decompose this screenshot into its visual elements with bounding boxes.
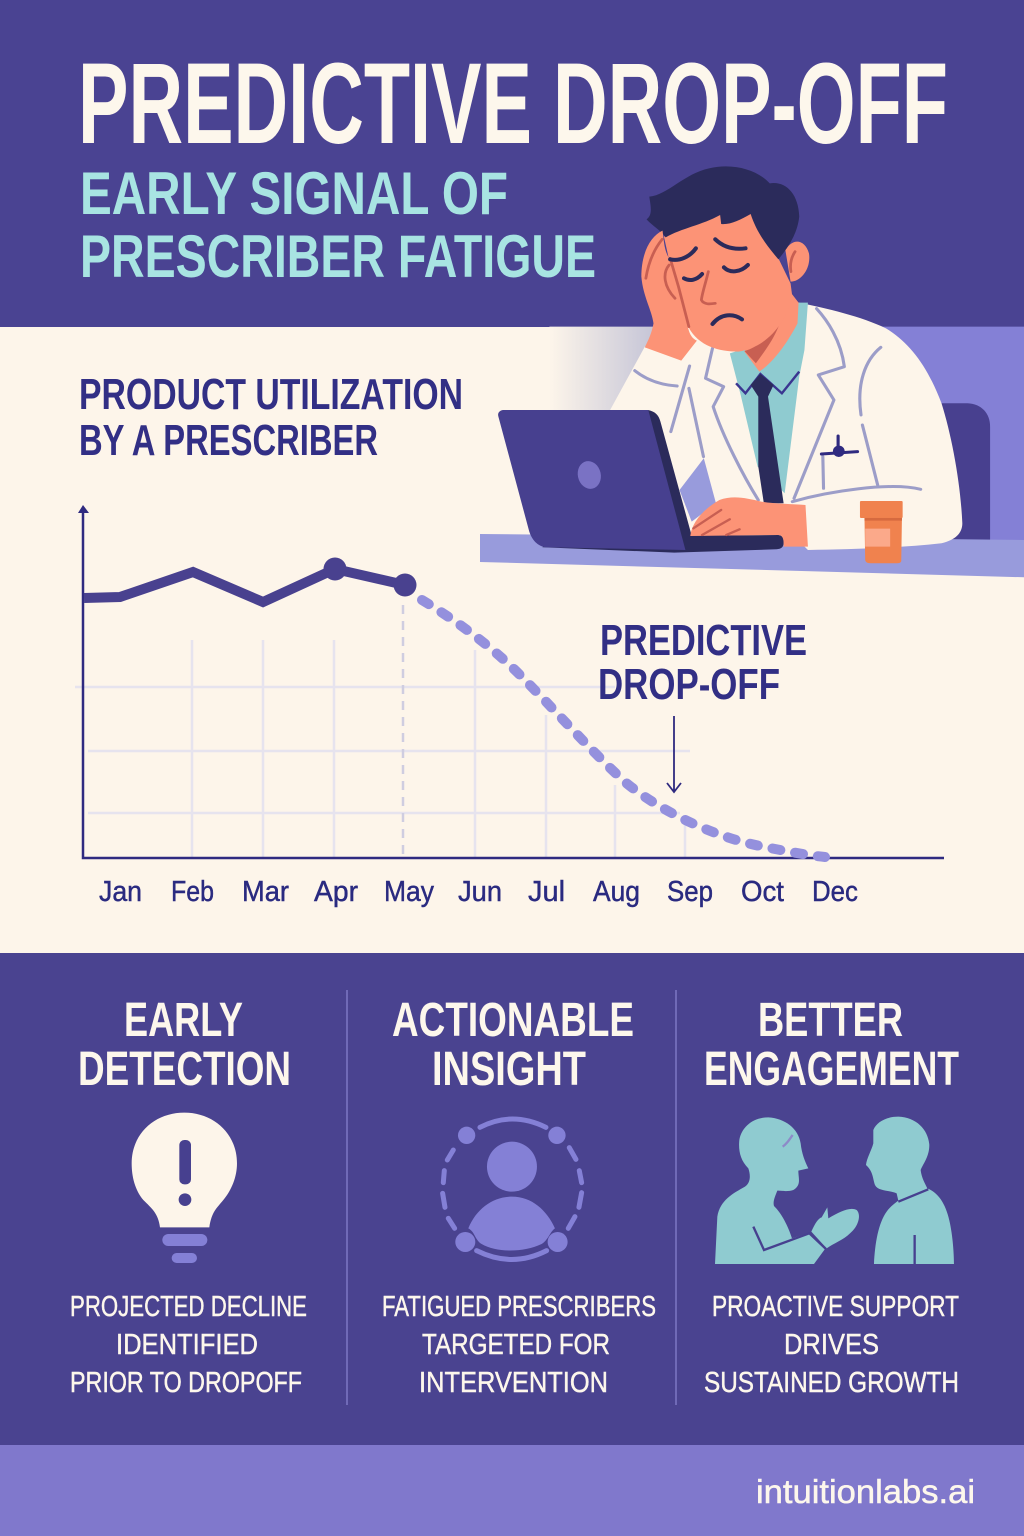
arrow to drop-off	[667, 716, 681, 792]
actual utilization line	[84, 569, 405, 602]
heading: ACTIONABLE	[392, 994, 634, 1047]
blue sleeve	[680, 458, 716, 522]
heading: DETECTION	[78, 1043, 291, 1096]
panel: actionable insight	[382, 994, 656, 1399]
chart heading: BY A PRESCRIBER	[79, 416, 378, 465]
hand on head	[641, 231, 697, 361]
panel: early detection	[70, 994, 307, 1399]
fading backdrop	[549, 327, 660, 410]
description: PROACTIVE SUPPORT	[712, 1291, 959, 1323]
heading	[392, 994, 634, 1096]
callout: predictive drop-off: PREDICTIVE	[600, 616, 807, 665]
may marker	[394, 574, 416, 596]
brand: intuitionlabs.ai	[756, 1473, 975, 1510]
benefits band	[0, 953, 1024, 1445]
month labels: May	[384, 876, 434, 908]
hand on laptop	[690, 497, 808, 547]
description: FATIGUED PRESCRIBERS	[382, 1291, 656, 1323]
subtitle	[80, 160, 596, 290]
grid lines	[75, 605, 690, 858]
month labels	[99, 876, 858, 908]
bottle cap	[860, 501, 903, 518]
description: INTERVENTION	[419, 1367, 608, 1399]
heading	[78, 994, 291, 1096]
heading: EARLY	[124, 994, 243, 1047]
line chart	[75, 505, 944, 908]
footer band	[0, 1445, 1024, 1536]
subtitle: EARLY SIGNAL OF	[80, 160, 508, 227]
panel: better engagement	[704, 994, 959, 1399]
icon: two people talking	[715, 1117, 954, 1264]
month labels: Aug	[593, 876, 640, 908]
subtitle: PRESCRIBER FATIGUE	[80, 223, 596, 290]
callout: predictive drop-off: DROP-OFF	[598, 660, 780, 709]
bottle shade	[864, 518, 902, 521]
medicine bottle body	[864, 517, 902, 563]
chart heading	[79, 370, 463, 465]
description: SUSTAINED GROWTH	[704, 1367, 959, 1399]
tie	[751, 374, 784, 503]
month labels: Sep	[667, 876, 713, 908]
axis arrow head	[78, 505, 89, 513]
axes	[83, 510, 944, 858]
description: PRIOR TO DROPOFF	[70, 1367, 302, 1399]
hand finger lines	[693, 510, 740, 535]
laptop base and side	[542, 410, 784, 553]
month labels: Mar	[242, 876, 289, 908]
ear detail	[790, 252, 795, 272]
finger lines	[646, 239, 689, 327]
ear	[785, 242, 809, 282]
month labels: Jun	[458, 876, 502, 908]
hair	[647, 166, 799, 259]
chart heading: PRODUCT UTILIZATION	[79, 370, 463, 419]
description	[704, 1291, 959, 1399]
face	[664, 213, 792, 352]
month labels: Oct	[741, 876, 784, 908]
description	[382, 1291, 656, 1399]
description	[70, 1291, 307, 1399]
callout: predictive drop-off	[598, 616, 807, 709]
description: TARGETED FOR	[422, 1329, 610, 1361]
description: DRIVES	[784, 1329, 879, 1361]
collar line	[736, 372, 799, 393]
face features: brows, eyes	[670, 239, 748, 324]
month labels: Feb	[171, 876, 214, 908]
neck shadow	[744, 290, 799, 372]
month labels: Jan	[99, 876, 142, 908]
heading	[704, 994, 959, 1096]
icon: light bulb with exclamation	[132, 1113, 237, 1263]
bottle label	[865, 529, 890, 547]
laptop lid	[498, 410, 685, 550]
coat lines	[635, 309, 921, 502]
neck shade	[744, 309, 784, 363]
heading: INSIGHT	[432, 1043, 586, 1096]
header band	[0, 0, 1024, 327]
desk	[480, 534, 1024, 577]
description: PROJECTED DECLINE	[70, 1291, 307, 1323]
pen clip	[833, 446, 845, 457]
description: IDENTIFIED	[116, 1329, 258, 1361]
month labels: Dec	[812, 876, 858, 908]
icon: person in dashed ring	[443, 1119, 582, 1259]
purple wall panel	[862, 327, 1024, 547]
shirt	[730, 303, 808, 493]
april marker	[324, 558, 346, 580]
month labels: Apr	[314, 876, 358, 908]
pen in pocket	[821, 436, 858, 454]
illustration: fatigued doctor at laptop	[480, 166, 1024, 577]
nose	[701, 272, 715, 304]
laptop logo	[575, 459, 604, 491]
projected dashed line	[422, 600, 825, 857]
cream chart panel background	[0, 327, 1024, 953]
white coat	[610, 303, 962, 550]
heading: BETTER	[758, 994, 903, 1047]
month labels: Jul	[528, 876, 565, 908]
chair back	[931, 403, 990, 540]
